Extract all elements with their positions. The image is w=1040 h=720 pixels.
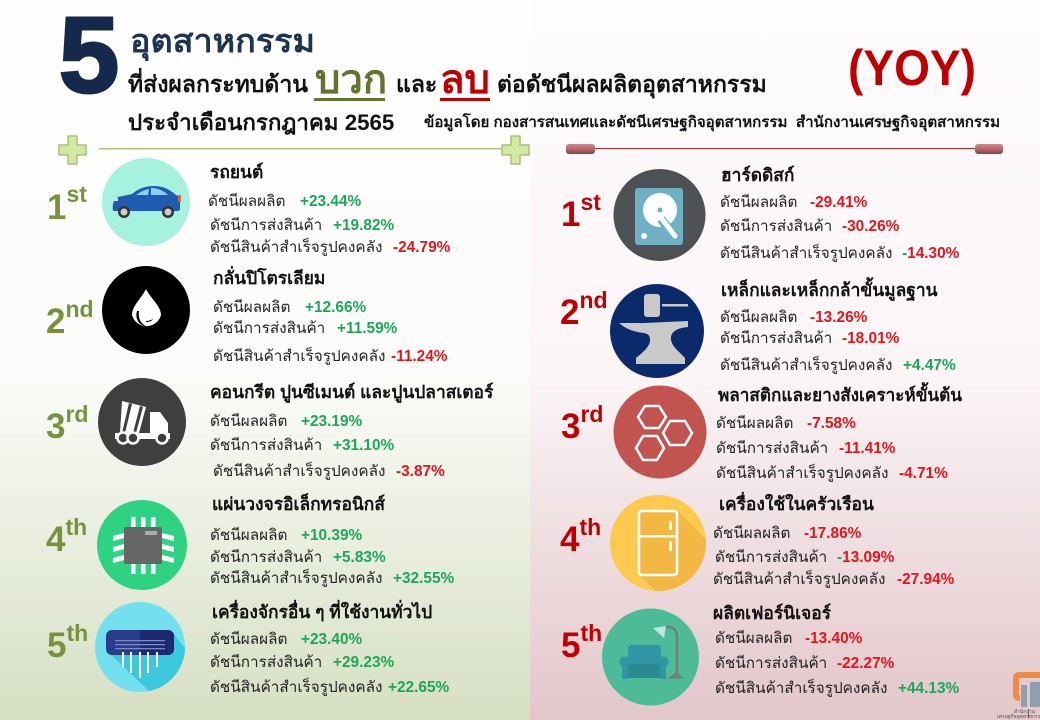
inventory index: ดัชนีสินค้าสำเร็จรูปคงคลัง (210, 237, 382, 256)
industry name: ผลิตเฟอร์นิเจอร์ (713, 603, 832, 623)
icon: cement truck (98, 378, 186, 466)
production index: ดัชนีผลผลิต (213, 299, 290, 316)
shipment index: ดัชนีการส่งสินค้า (210, 654, 322, 671)
inventory index (720, 355, 956, 374)
rank 4th: th (65, 514, 87, 540)
icon: car (102, 158, 190, 246)
negative item 4: household appliances (560, 491, 955, 591)
shipment index: ดัชนีการส่งสินค้า (720, 218, 832, 235)
shipment index: -11.41% (839, 440, 896, 457)
rank 5th: th (66, 620, 88, 646)
production index: ดัชนีผลผลิต (715, 630, 792, 647)
industry name: เครื่องจักรอื่น ๆ ที่ใช้งานทั่วไป (212, 599, 432, 622)
YOY label: (YOY) (848, 40, 976, 96)
positive item 4: electronics (46, 492, 455, 590)
shipment index (210, 549, 386, 566)
shipment index: -13.09% (837, 549, 895, 566)
title: อุตสาหกรรม (130, 23, 315, 62)
inventory index: -14.30% (902, 245, 960, 262)
shipment index: +31.10% (333, 437, 395, 454)
title: ประจำเดือนกรกฎาคม 2565 (128, 110, 394, 135)
rank 2nd: nd (65, 296, 94, 322)
production index (213, 299, 367, 316)
production index (716, 415, 856, 432)
shipment index (213, 320, 398, 337)
inventory index: ดัชนีสินค้าสำเร็จรูปคงคลัง (213, 461, 385, 480)
rank 3rd: 3 (46, 407, 65, 446)
shipment index: ดัชนีการส่งสินค้า (715, 655, 827, 672)
title: บวก (315, 58, 387, 102)
inventory index (210, 237, 451, 256)
shipment index: ดัชนีการส่งสินค้า (210, 437, 322, 454)
production index: -7.58% (807, 415, 856, 432)
industry name: เครื่องใช้ในครัวเรือน (719, 491, 874, 514)
inventory index: -3.87% (396, 463, 445, 480)
inventory index (720, 243, 960, 262)
production index: -13.26% (810, 309, 868, 326)
inventory index: -4.71% (899, 465, 948, 482)
logo (997, 675, 1040, 720)
inventory index: ดัชนีสินค้าสำเร็จรูปคงคลัง (210, 568, 382, 587)
icon: hexagons (614, 386, 706, 478)
rank 3rd: 3 (561, 407, 580, 446)
production index: +23.19% (301, 413, 363, 430)
rank 4th: th (579, 514, 601, 540)
title (128, 23, 767, 135)
shipment index: +11.59% (337, 320, 398, 337)
rank 3rd: rd (65, 401, 88, 427)
production index (713, 525, 862, 542)
shipment index: -22.27% (837, 655, 895, 672)
icon: air conditioner (95, 602, 185, 692)
inventory index: +44.13% (898, 680, 960, 697)
production index: ดัชนีผลผลิต (720, 309, 797, 326)
negative item 1: hard disk (561, 165, 960, 262)
inventory index (210, 677, 450, 696)
production index (720, 309, 868, 326)
inventory index: +32.55% (393, 570, 455, 587)
inventory index: ดัชนีสินค้าสำเร็จรูปคงคลัง (716, 463, 888, 482)
production index: -13.40% (805, 630, 863, 647)
negative item 5: furniture (561, 603, 960, 706)
production index: ดัชนีผลผลิต (208, 193, 285, 210)
shipment index: ดัชนีการส่งสินค้า (715, 549, 827, 566)
industry name: รถยนต์ (210, 162, 263, 182)
shipment index (716, 440, 896, 457)
rank 1st: 1 (561, 195, 580, 234)
shipment index (715, 549, 895, 566)
production index: ดัชนีผลผลิต (716, 415, 793, 432)
shipment index (210, 217, 395, 234)
background: left panel (0, 0, 530, 720)
production index: ดัชนีผลผลิต (210, 527, 287, 544)
production index: ดัชนีผลผลิต (210, 413, 287, 430)
production index (210, 527, 363, 544)
rank 1st: st (580, 189, 601, 215)
icon: oil drop (102, 266, 190, 354)
industry name: เหล็กและเหล็กกล้าขั้นมูลฐาน (721, 277, 938, 302)
inventory index: -11.24% (391, 348, 448, 365)
shipment index (210, 654, 395, 671)
inventory index: ดัชนีสินค้าสำเร็จรูปคงคลัง (713, 569, 885, 588)
divider: positive (59, 136, 529, 164)
shipment index: ดัชนีการส่งสินค้า (720, 330, 832, 347)
icon: chip (97, 500, 187, 590)
production index (210, 413, 363, 430)
title: ที่ส่งผลกระทบด้าน (128, 67, 308, 97)
shipment index (715, 655, 895, 672)
rank 5th: th (580, 620, 602, 646)
positive item 1: cars (47, 158, 451, 256)
rank 5th: 5 (561, 626, 580, 665)
production index: +23.40% (301, 631, 363, 648)
shipment index: ดัชนีการส่งสินค้า (210, 217, 322, 234)
production index: -17.86% (804, 525, 862, 542)
positive item 2: refinery (46, 265, 448, 365)
shipment index: ดัชนีการส่งสินค้า (716, 440, 828, 457)
shipment index (720, 218, 900, 235)
icon: sofa and lamp (602, 608, 699, 706)
inventory index (213, 461, 445, 480)
rank 3rd: rd (580, 401, 603, 427)
production index (210, 631, 363, 648)
icon: refrigerator (610, 495, 706, 591)
inventory index: ดัชนีสินค้าสำเร็จรูปคงคลัง (213, 346, 385, 365)
shipment index: ดัชนีการส่งสินค้า (210, 549, 322, 566)
icon: anvil (610, 284, 704, 378)
production index: +10.39% (301, 527, 363, 544)
shipment index: ดัชนีการส่งสินค้า (213, 320, 325, 337)
inventory index: ดัชนีสินค้าสำเร็จรูปคงคลัง (720, 355, 892, 374)
inventory index: +22.65% (388, 679, 450, 696)
inventory index: ดัชนีสินค้าสำเร็จรูปคงคลัง (210, 677, 382, 696)
positive item 3: cement (46, 378, 494, 480)
icon: hard disk (614, 169, 706, 261)
production index: ดัชนีผลผลิต (713, 525, 790, 542)
shipment index: +29.23% (333, 654, 395, 671)
shipment index: +19.82% (333, 217, 395, 234)
rank 2nd: 2 (46, 302, 65, 341)
title: ลบ (440, 58, 490, 102)
divider: negative (566, 144, 1003, 154)
industry name: กลั่นปิโตรเลียม (213, 265, 325, 288)
title: และ (396, 71, 437, 97)
shipment index: +5.83% (333, 549, 386, 566)
shipment index (210, 437, 395, 454)
rank 4th: 4 (560, 520, 579, 559)
production index (208, 193, 362, 210)
industry name: คอนกรีต ปูนซีเมนต์ และปูนปลาสเตอร์ (210, 382, 494, 404)
production index: -29.41% (810, 194, 868, 211)
production index (720, 194, 868, 211)
inventory index: -24.79% (393, 239, 451, 256)
production index: +23.44% (300, 193, 362, 210)
rank 2nd: 2 (560, 293, 579, 332)
rank 1st: 1 (47, 188, 66, 227)
background: right panel (530, 0, 1040, 720)
rank 4th: 4 (46, 520, 65, 559)
shipment index: -30.26% (842, 218, 900, 235)
negative item 3: plastics (561, 382, 962, 482)
inventory index: ดัชนีสินค้าสำเร็จรูปคงคลัง (715, 678, 887, 697)
source note: ข้อมูลโดย กองสารสนเทศและดัชนีเศรษฐกิจอุตสาหกรรม สำนักงานเศรษฐกิจอุตสาหกรรม (424, 112, 1000, 132)
rank 2nd: nd (579, 287, 608, 313)
inventory index (210, 568, 455, 587)
production index: ดัชนีผลผลิต (720, 194, 797, 211)
logo: สำนักงาน (1014, 709, 1036, 715)
inventory index (716, 463, 948, 482)
inventory index: -27.94% (897, 571, 955, 588)
inventory index (213, 346, 448, 365)
production index: ดัชนีผลผลิต (210, 631, 287, 648)
industry name: ฮาร์ดดิสก์ (721, 165, 794, 185)
inventory index (715, 678, 960, 697)
negative item 2: steel (560, 277, 956, 378)
rank 1st: st (66, 181, 87, 207)
rank 5th: 5 (47, 626, 66, 665)
industry name: แผ่นวงจรอิเล็กทรอนิกส์ (212, 492, 385, 514)
inventory index (713, 569, 955, 588)
title: ต่อดัชนีผลผลิตอุตสาหกรรม (497, 71, 767, 99)
positive item 5: machinery (47, 599, 450, 696)
production index (715, 630, 863, 647)
inventory index: ดัชนีสินค้าสำเร็จรูปคงคลัง (720, 243, 892, 262)
shipment index (720, 330, 900, 347)
shipment index: -18.01% (842, 330, 900, 347)
industry name: พลาสติกและยางสังเคราะห์ขั้นต้น (718, 382, 962, 405)
inventory index: +4.47% (903, 357, 956, 374)
production index: +12.66% (305, 299, 367, 316)
